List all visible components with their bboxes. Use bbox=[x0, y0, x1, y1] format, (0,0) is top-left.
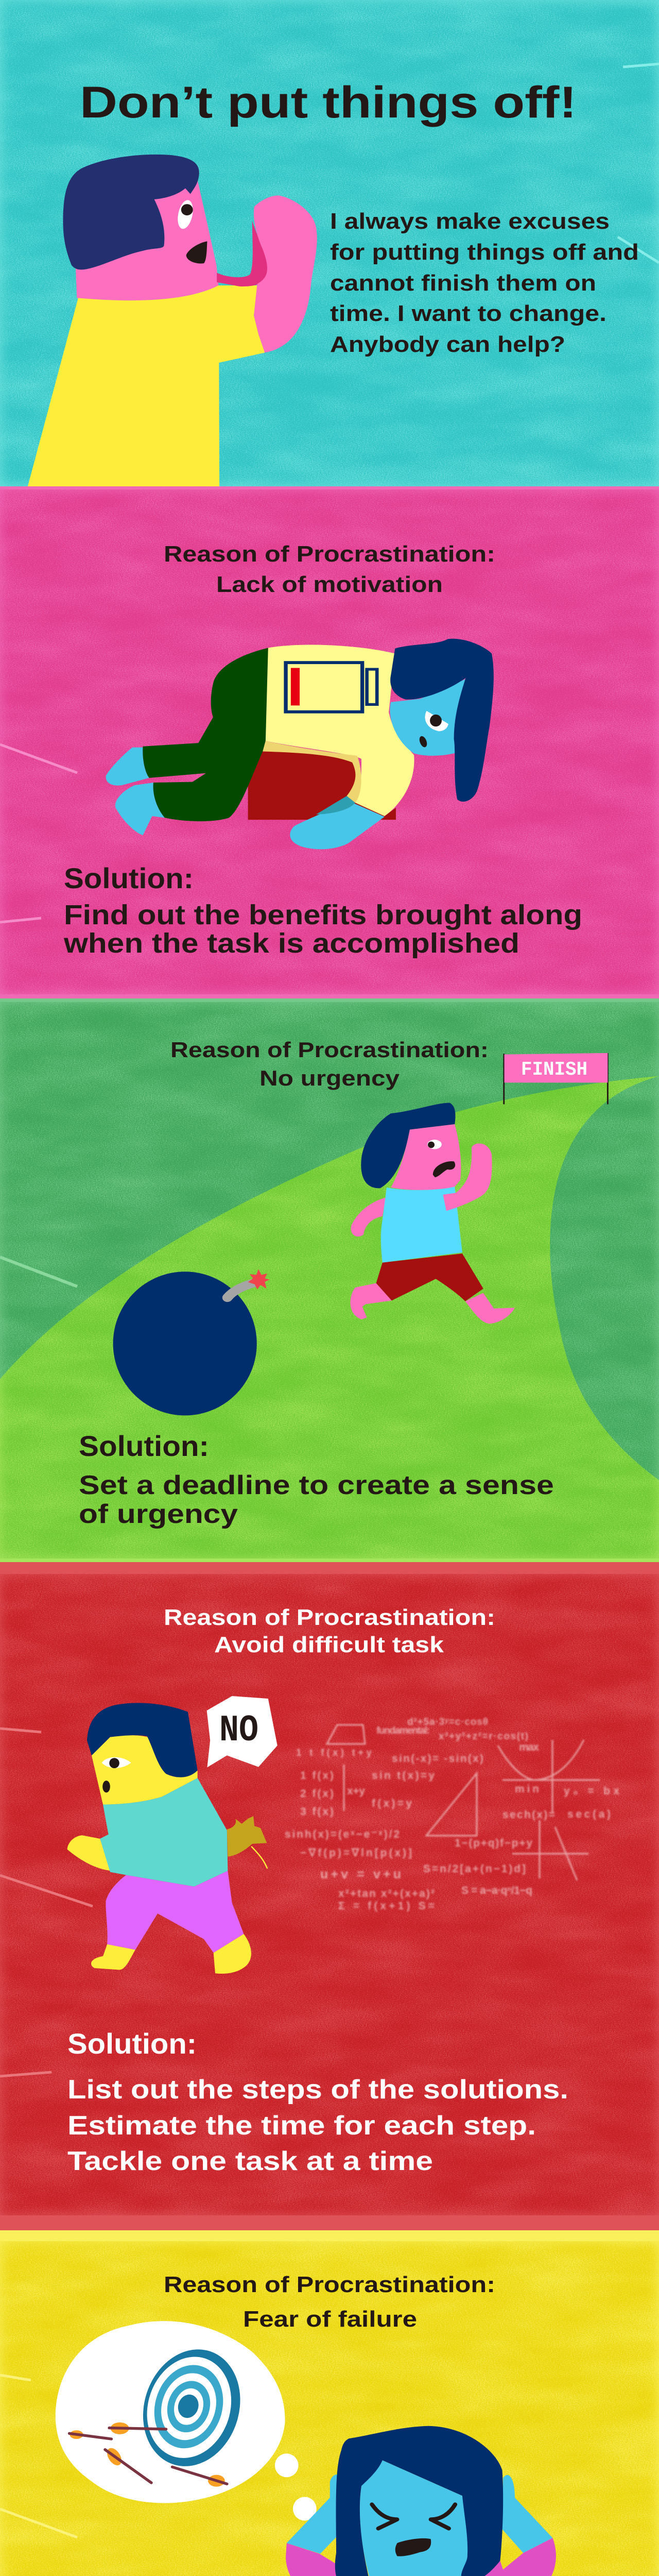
reason heading: Reason of Procrastination: bbox=[170, 1038, 489, 1062]
solution text: Set a deadline to create a sense bbox=[79, 1470, 554, 1500]
blurred math formulas on the wall: S=n/2[a+(n−1)d] bbox=[423, 1863, 526, 1875]
solution text: Solution: bbox=[64, 862, 194, 894]
blurred math formulas on the wall: S = a−a·qⁿ/1−q bbox=[461, 1885, 532, 1896]
blurred math formulas on the wall: −∇f(p)=∇ln[p(x)] bbox=[300, 1847, 412, 1859]
intro question text: cannot finish them on bbox=[330, 270, 596, 296]
blurred math formulas on the wall bbox=[285, 1717, 619, 1912]
blurred math formulas on the wall: Σ = f(x+1) S= bbox=[338, 1900, 435, 1912]
blurred math formulas on the wall: x+y bbox=[347, 1785, 365, 1797]
reason heading: Avoid difficult task bbox=[214, 1632, 444, 1657]
character: running person bbox=[350, 1103, 515, 1324]
blurred math formulas on the wall: y₀ = bx bbox=[564, 1785, 619, 1797]
blurred math formulas on the wall: 3 f(x) bbox=[300, 1806, 334, 1818]
blurred math formulas on the wall: f(x)=y bbox=[372, 1798, 412, 1809]
blurred math formulas on the wall: d²+5a·3ʸ=c·cosθ bbox=[407, 1717, 488, 1727]
panel: no urgency bbox=[0, 998, 659, 1562]
solution text bbox=[79, 1430, 554, 1529]
blurred math formulas on the wall: sec(a) bbox=[567, 1808, 611, 1820]
green textured background bbox=[0, 998, 659, 1562]
reason heading: Reason of Procrastination: bbox=[164, 541, 495, 567]
solution text: of urgency bbox=[79, 1499, 238, 1529]
solution text bbox=[67, 2027, 568, 2176]
panel: lack of motivation bbox=[0, 486, 659, 998]
solution text: Solution: bbox=[79, 1430, 209, 1462]
blurred math formulas on the wall: x²+tan x²+(x+a)² bbox=[338, 1888, 435, 1900]
solution text: when the task is accomplished bbox=[63, 928, 519, 959]
solution text: List out the steps of the solutions. bbox=[67, 2075, 568, 2105]
panel: avoid difficult task bbox=[0, 1562, 659, 2230]
blurred math formulas on the wall: sinh(x)=(eˣ−e⁻ˣ)/2 bbox=[285, 1828, 400, 1840]
blurred math formulas on the wall: fundamental: bbox=[376, 1725, 430, 1736]
pink textured background bbox=[0, 486, 659, 998]
intro question text: I always make excuses bbox=[330, 209, 610, 234]
solution text: Estimate the time for each step. bbox=[67, 2111, 536, 2141]
reason heading bbox=[164, 2272, 495, 2332]
reason heading: Reason of Procrastination: bbox=[164, 2272, 495, 2297]
blurred math formulas on the wall: sin t(x)=y bbox=[372, 1770, 435, 1782]
green hill road bbox=[0, 1076, 659, 1562]
solution text: Tackle one task at a time bbox=[67, 2146, 433, 2176]
blurred math formulas on the wall: min bbox=[515, 1783, 539, 1795]
speech bubble: NO bbox=[207, 1696, 278, 1767]
character: stressed person holding head bbox=[286, 2426, 556, 2576]
reason heading bbox=[164, 541, 495, 597]
intro question text: time. I want to change. bbox=[330, 301, 606, 326]
reason heading: Lack of motivation bbox=[216, 572, 443, 597]
reason heading: No urgency bbox=[259, 1066, 400, 1090]
icon: bomb bbox=[113, 1269, 270, 1415]
speech bubble: NO: NO bbox=[219, 1709, 258, 1752]
title: Don’t put things off! bbox=[80, 78, 577, 127]
blurred math formulas on the wall: sin(-x)= -sin(x) bbox=[392, 1753, 483, 1765]
blurred math formulas on the wall: x²+y²+z²=r·cos(t) bbox=[439, 1731, 528, 1742]
thought bubble with target and missed arrows bbox=[56, 2321, 317, 2520]
intro question text: for putting things off and bbox=[330, 240, 639, 265]
blurred math formulas on the wall: 1 f(x) bbox=[300, 1770, 334, 1782]
solution text: Find out the benefits brought along bbox=[64, 900, 582, 930]
character: collapsed person with low battery bbox=[106, 639, 494, 849]
reason heading bbox=[170, 1038, 489, 1090]
reason heading: Reason of Procrastination: bbox=[164, 1605, 495, 1630]
yellow textured background bbox=[0, 2230, 659, 2576]
blurred math formulas on the wall: max bbox=[519, 1741, 539, 1753]
blurred math formulas on the wall: 1−(p+q)f−p+y bbox=[455, 1837, 532, 1849]
blurred math formulas on the wall: 1 t f(x) t+y bbox=[296, 1748, 372, 1758]
intro textured background bbox=[0, 0, 659, 486]
red textured background bbox=[0, 1562, 659, 2230]
blurred math formulas on the wall: 2 f(x) bbox=[300, 1788, 334, 1800]
finish flag: FINISH bbox=[521, 1059, 587, 1081]
finish flag bbox=[504, 1053, 608, 1104]
solution text bbox=[63, 862, 582, 959]
character: person with hand to mouth bbox=[28, 155, 317, 486]
reason heading bbox=[164, 1605, 495, 1657]
intro question text: Anybody can help? bbox=[330, 332, 565, 357]
blurred math formulas on the wall: u+v = v+u bbox=[320, 1867, 401, 1882]
panel: intro bbox=[0, 0, 659, 486]
intro question text bbox=[330, 209, 639, 357]
character: person walking away bbox=[67, 1703, 267, 1974]
reason heading: Fear of failure bbox=[243, 2307, 417, 2332]
blurred math formulas on the wall: sech(x)= bbox=[502, 1809, 555, 1821]
solution text: Solution: bbox=[67, 2027, 197, 2060]
panel: fear of failure bbox=[0, 2230, 659, 2576]
